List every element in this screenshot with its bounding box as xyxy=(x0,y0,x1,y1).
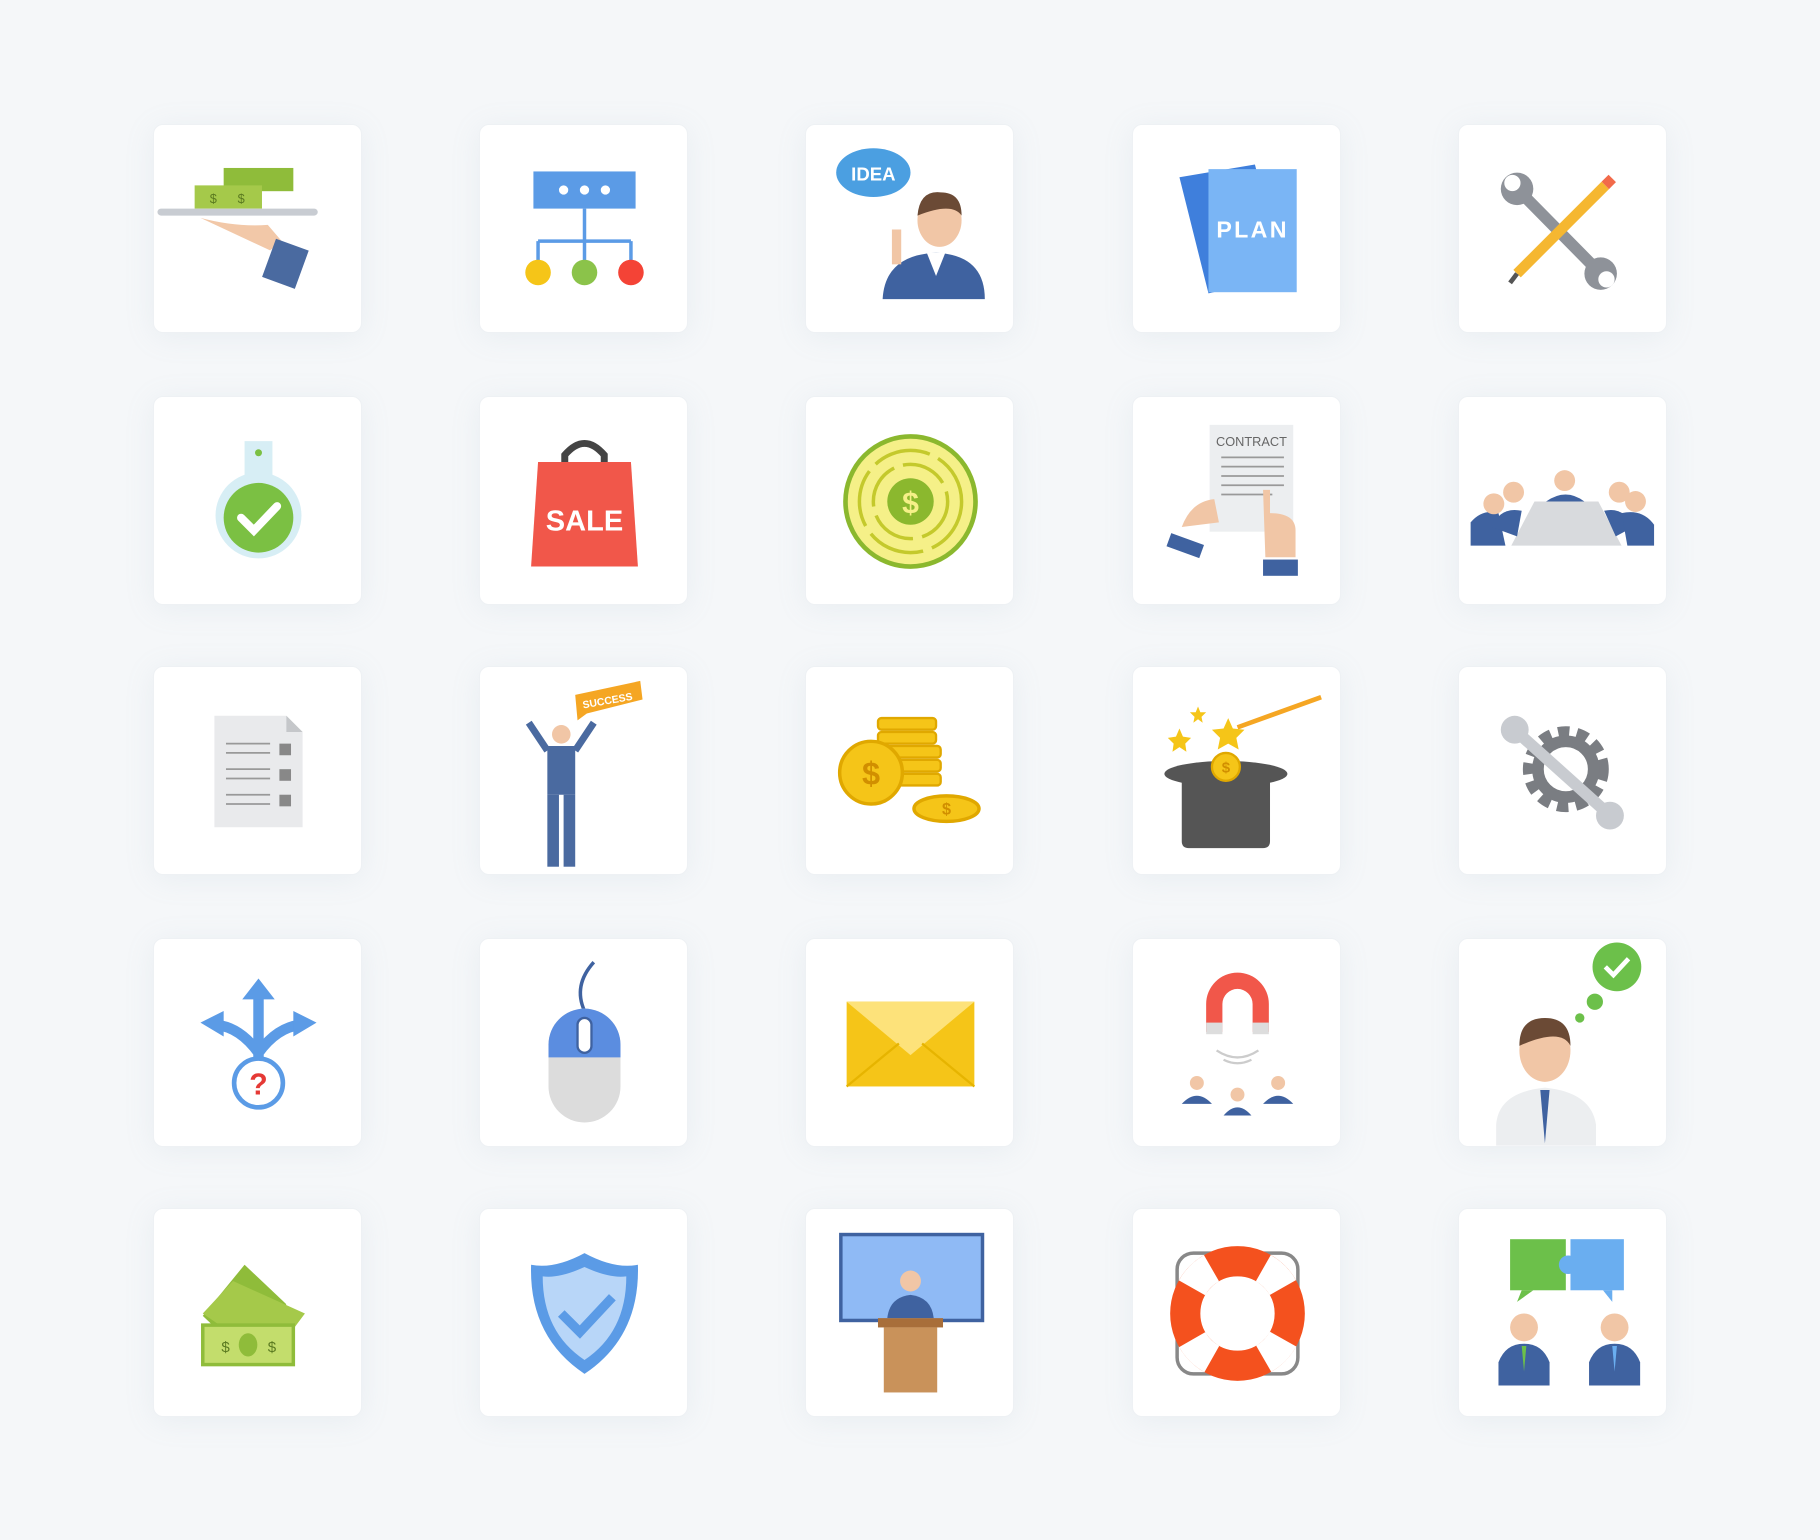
tile: sale bag xyxy=(479,396,688,605)
tile: success man xyxy=(479,666,688,875)
tile: coins xyxy=(805,666,1014,875)
tile: envelope xyxy=(805,938,1014,1147)
tile: decision arrows: ? xyxy=(249,1069,268,1102)
tile: decision arrows xyxy=(153,938,362,1147)
tile: cash xyxy=(153,1208,362,1417)
tile: magic hat xyxy=(1132,666,1341,875)
tile: gear wrench xyxy=(1458,666,1667,875)
tile: idea man xyxy=(805,124,1014,333)
tile: money on tray: $ xyxy=(210,191,217,206)
tile: meeting xyxy=(1458,396,1667,605)
tile: collaboration xyxy=(1458,1208,1667,1417)
tile: plan xyxy=(1132,124,1341,333)
tile: sale bag: SALE xyxy=(546,506,623,538)
tile: coin maze xyxy=(805,396,1014,605)
tile: contract xyxy=(1132,396,1341,605)
tile: coins: $ xyxy=(862,755,880,791)
tile: magnet xyxy=(1132,938,1341,1147)
tile: money on tray: $ xyxy=(238,191,245,206)
tile: wrench and pencil xyxy=(1458,124,1667,333)
tile: magic hat: $ xyxy=(1222,760,1231,777)
tile: coin maze: $ xyxy=(902,487,919,520)
tile: plan: PLAN xyxy=(1216,217,1289,243)
tile: document list xyxy=(153,666,362,875)
tile: shield xyxy=(479,1208,688,1417)
tile: cash: $ xyxy=(268,1339,277,1356)
tile: flask check xyxy=(153,396,362,605)
tile: contract: CONTRACT xyxy=(1216,434,1287,449)
tile: coins: $ xyxy=(942,800,951,818)
tile: person check thought xyxy=(1458,938,1667,1147)
tile: money on tray xyxy=(153,124,362,333)
tile: cash: $ xyxy=(221,1339,230,1356)
tile: mouse xyxy=(479,938,688,1147)
tile: hierarchy xyxy=(479,124,688,333)
tile: lifebuoy xyxy=(1132,1208,1341,1417)
tile: presentation xyxy=(805,1208,1014,1417)
tile: success man: SUCCESS xyxy=(582,692,634,711)
tile: idea man: IDEA xyxy=(851,164,896,185)
